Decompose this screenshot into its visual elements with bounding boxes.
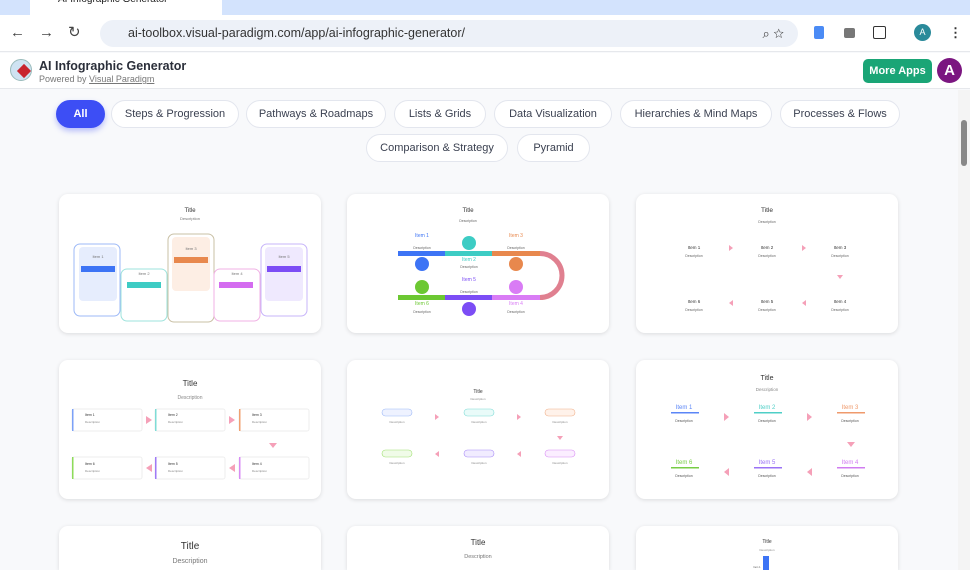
card: roadmap snake: Item 2 bbox=[462, 257, 476, 263]
card: list boxes: Item 2 bbox=[168, 413, 178, 417]
card: process grid: Description bbox=[831, 308, 849, 312]
card: list boxes: Item 1 bbox=[85, 413, 95, 417]
card: roadmap snake: Description bbox=[460, 290, 478, 294]
card: list boxes: Title bbox=[183, 379, 198, 388]
card: steps progression: Item 4 bbox=[231, 271, 243, 276]
card: roadmap snake: Item 6 bbox=[415, 301, 429, 307]
card: list boxes: Item 4 bbox=[252, 462, 262, 466]
filter pills: Data Visualization bbox=[509, 108, 597, 120]
card row 3: card 2: Title bbox=[471, 538, 486, 547]
card: list boxes: Description bbox=[168, 420, 183, 424]
filter pills: Hierarchies & Mind Maps bbox=[635, 108, 757, 120]
card: steps progression bbox=[59, 194, 321, 333]
address bar bbox=[100, 20, 798, 47]
card: process grid: Description bbox=[758, 308, 776, 312]
logo icon bbox=[10, 59, 32, 81]
card: list boxes: Description bbox=[85, 420, 100, 424]
card: roadmap snake: Description bbox=[413, 310, 431, 314]
filter pills: Pyramid bbox=[533, 142, 574, 154]
card: item underlines: Description bbox=[758, 419, 776, 423]
card: steps progression: Item 5 bbox=[278, 254, 290, 259]
address bar: ⌕ ☆ bbox=[762, 26, 784, 41]
card: roadmap snake: Description bbox=[507, 310, 525, 314]
avatar bbox=[937, 58, 962, 83]
card: item underlines: Item 5 bbox=[759, 460, 776, 466]
card: process grid: Item 3 bbox=[834, 245, 847, 250]
card: process grid: Item 4 bbox=[834, 299, 847, 304]
card: process grid: Description bbox=[831, 254, 849, 258]
card row 3: card 3: Item 1 bbox=[754, 566, 761, 569]
card row 3: card 3: Description bbox=[759, 548, 775, 552]
card: item underlines: Description bbox=[758, 474, 776, 478]
filter pills: Steps & Progression bbox=[125, 108, 225, 120]
card row 3: card 2: Description bbox=[464, 554, 492, 560]
extension icons: A bbox=[919, 27, 926, 37]
card: list boxes: Description bbox=[85, 469, 100, 473]
card: item underlines bbox=[636, 360, 898, 499]
card row 3: card 3: Title bbox=[762, 539, 772, 545]
card: roadmap snake: Description bbox=[507, 246, 525, 250]
card: flow nodes: Description bbox=[552, 461, 568, 465]
card: item underlines: Item 2 bbox=[759, 405, 776, 411]
card: roadmap snake: Description bbox=[460, 265, 478, 269]
app header bbox=[0, 53, 970, 89]
filter pills: Lists & Grids bbox=[409, 108, 471, 120]
card: roadmap snake: Title bbox=[462, 208, 474, 214]
card: list boxes bbox=[59, 360, 321, 499]
card: flow nodes: Description bbox=[470, 397, 486, 401]
card: roadmap snake: Item 3 bbox=[509, 233, 523, 239]
card row 3: card 1: Description bbox=[172, 558, 208, 565]
card row 3: card 2 bbox=[347, 526, 609, 570]
card: process grid: Item 2 bbox=[761, 245, 774, 250]
card: flow nodes: Description bbox=[552, 420, 568, 424]
card: process grid: Item 6 bbox=[688, 299, 701, 304]
card: list boxes: Description bbox=[177, 395, 203, 401]
card: process grid: Item 1 bbox=[688, 245, 701, 250]
address bar: ai-toolbox.visual-paradigm.com/app/ai-infographic-generator/ bbox=[128, 26, 465, 40]
card: item underlines: Description bbox=[675, 474, 693, 478]
card: process grid bbox=[636, 194, 898, 333]
card: steps progression: Title bbox=[184, 208, 196, 214]
nav icons: ←→↻ bbox=[10, 24, 95, 41]
card: item underlines: Description bbox=[841, 419, 859, 423]
card: list boxes: Description bbox=[252, 469, 267, 473]
card: roadmap snake: Description bbox=[413, 246, 431, 250]
card: item underlines: Item 6 bbox=[676, 460, 693, 466]
card row 3: card 1 bbox=[59, 526, 321, 570]
scrollbar bbox=[958, 90, 970, 570]
card: process grid: Description bbox=[685, 308, 703, 312]
more apps button: More Apps bbox=[869, 65, 926, 77]
card: roadmap snake: Item 5 bbox=[462, 277, 476, 283]
card: list boxes: Item 5 bbox=[168, 462, 178, 466]
card: roadmap snake bbox=[347, 194, 609, 333]
card: flow nodes bbox=[347, 360, 609, 499]
card: item underlines: Description bbox=[756, 387, 779, 392]
card: item underlines: Item 4 bbox=[842, 460, 859, 466]
browser toolbar bbox=[0, 15, 970, 52]
card: process grid: Description bbox=[685, 254, 703, 258]
more apps button bbox=[863, 59, 932, 83]
card: process grid: Description bbox=[758, 254, 776, 258]
card: process grid: Item 5 bbox=[761, 299, 774, 304]
card: flow nodes: Description bbox=[389, 420, 405, 424]
filter pills: Comparison & Strategy bbox=[380, 142, 494, 154]
filter pills bbox=[53, 100, 900, 162]
card: list boxes: Item 3 bbox=[252, 413, 262, 417]
filter pills: All bbox=[73, 108, 88, 120]
filter pills: Processes & Flows bbox=[793, 108, 887, 120]
filter pills: Pathways & Roadmaps bbox=[259, 108, 373, 120]
card: flow nodes: Description bbox=[471, 461, 487, 465]
card: item underlines: Description bbox=[675, 419, 693, 423]
avatar: A bbox=[944, 62, 955, 79]
extension icons bbox=[814, 24, 962, 41]
card: roadmap snake: Description bbox=[459, 219, 477, 223]
browser tab strip bbox=[0, 0, 970, 15]
card: steps progression: Item 3 bbox=[185, 246, 197, 251]
card: roadmap snake: Item 4 bbox=[509, 301, 523, 307]
card: item underlines: Item 3 bbox=[842, 405, 859, 411]
card: process grid: Title bbox=[761, 207, 773, 214]
card row 3: card 3 bbox=[636, 526, 898, 570]
card: list boxes: Description bbox=[252, 420, 267, 424]
card: flow nodes: Description bbox=[471, 420, 487, 424]
app title: AI Infographic Generator bbox=[39, 59, 186, 73]
extension icons: ⋮ bbox=[949, 25, 962, 40]
card row 3: card 1: Title bbox=[181, 541, 200, 552]
card: steps progression: Item 1 bbox=[92, 254, 104, 259]
app header: Powered by Visual Paradigm bbox=[39, 74, 154, 84]
card: roadmap snake: Item 1 bbox=[415, 233, 429, 239]
active tab bbox=[30, 0, 222, 15]
card: steps progression: Description bbox=[180, 216, 200, 221]
card: item underlines: Title bbox=[761, 375, 774, 382]
card: flow nodes: Description bbox=[389, 461, 405, 465]
card: list boxes: Item 6 bbox=[85, 462, 95, 466]
card: steps progression: Item 2 bbox=[138, 271, 150, 276]
card: process grid: Description bbox=[758, 220, 776, 224]
card: list boxes: Description bbox=[168, 469, 183, 473]
card: item underlines: Item 1 bbox=[676, 405, 693, 411]
card: item underlines: Description bbox=[841, 474, 859, 478]
card: flow nodes: Title bbox=[473, 389, 483, 395]
